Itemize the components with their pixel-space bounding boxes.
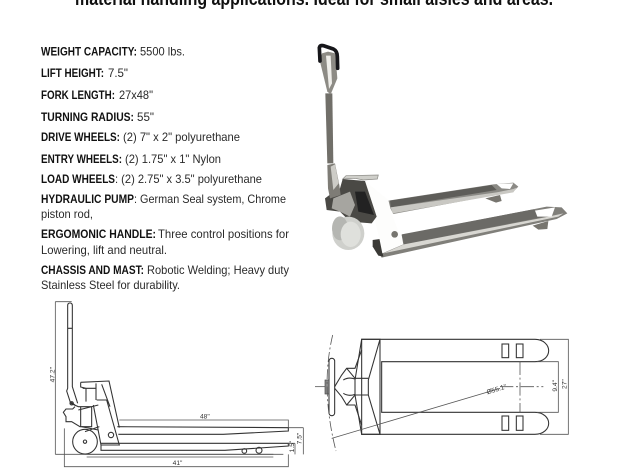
drive wheel — [332, 216, 364, 250]
turning radius line: Ø55.1" — [486, 383, 508, 396]
spec: chassis and mast: CHASSIS AND MAST: — [41, 264, 144, 277]
spec: turning radius: TURNING RADIUS: — [41, 111, 134, 124]
spec: chassis and mast: Robotic Welding; Heavy duty — [147, 264, 289, 277]
spec: hydraulic pump — [41, 193, 286, 221]
width dimensions: 27" — [562, 379, 569, 389]
spec: chassis and mast: Stainless Steel for durability. — [41, 279, 180, 292]
dimension labels: 7.5" — [297, 432, 304, 444]
spec: entry wheels: (2) 1.75" x 1" Nylon — [125, 153, 221, 166]
drive wheel — [73, 429, 97, 454]
specification list — [41, 46, 289, 292]
chassis — [81, 381, 119, 445]
spec: chassis and mast — [41, 264, 289, 292]
spec: entry wheels — [41, 153, 221, 166]
handle — [315, 358, 335, 416]
spec: fork length: 27x48" — [119, 89, 153, 102]
spec: lift height: 7.5" — [108, 67, 128, 80]
white chassis plate — [365, 181, 403, 253]
turning radius line — [332, 383, 508, 438]
bolt — [391, 231, 398, 238]
spec: weight capacity: 5500 lbs. — [140, 46, 185, 58]
pump — [63, 402, 99, 432]
spec: entry wheels: ENTRY WHEELS: — [41, 153, 122, 166]
spec: fork length: FORK LENGTH: — [41, 89, 115, 102]
height dimension — [49, 302, 283, 454]
spec: load wheels — [41, 173, 262, 186]
rear fork — [388, 183, 518, 214]
spec: hydraulic pump: : German Seal system, Chrome — [134, 193, 286, 206]
load wheels — [85, 447, 273, 457]
mast — [325, 93, 341, 198]
spec: weight capacity: WEIGHT CAPACITY: — [41, 46, 137, 58]
spec: ergonomic handle: ERGOMONIC HANDLE: — [41, 228, 156, 241]
front fork — [373, 207, 567, 258]
pallet truck photo illustration — [319, 46, 567, 258]
top view technical drawing — [315, 335, 569, 451]
spec: ergonomic handle — [41, 228, 289, 257]
height dimension: 47.2" — [49, 366, 56, 382]
dimension labels: 48" — [200, 413, 210, 420]
forks — [101, 427, 288, 450]
spec: hydraulic pump: piston rod, — [41, 208, 93, 221]
pump body — [325, 179, 377, 223]
center marks — [500, 362, 543, 412]
spec: turning radius: 55" — [137, 111, 154, 124]
chassis — [355, 339, 380, 434]
dimension labels — [64, 413, 304, 467]
side view technical drawing — [49, 302, 304, 467]
spec: hydraulic pump: HYDRAULIC PUMP — [41, 193, 134, 206]
spec: drive wheels — [41, 131, 240, 144]
width dimensions: 9.4" — [552, 379, 559, 392]
dimension labels: 1.5" — [289, 440, 296, 452]
spec: drive wheels: DRIVE WHEELS: — [41, 131, 120, 144]
width dimensions — [537, 339, 569, 434]
spec: load wheels: : (2) 2.75" x 3.5" polyurethane — [115, 173, 262, 186]
spec: ergonomic handle: Lowering, lift and neutral. — [41, 244, 167, 257]
spec: load wheels: LOAD WHEELS — [41, 173, 115, 186]
mast and handle — [67, 303, 78, 403]
fork outline — [362, 339, 549, 434]
spec: lift height: LIFT HEIGHT: — [41, 67, 104, 80]
pump linkage — [335, 350, 368, 425]
top bracket — [343, 175, 378, 180]
dimension labels: 41" — [173, 460, 183, 467]
spec: ergonomic handle: Three control positions for — [158, 228, 289, 241]
spec: drive wheels: (2) 7" x 2" polyurethane — [123, 131, 240, 144]
fork slots — [502, 344, 523, 430]
turning arc — [327, 335, 336, 451]
handle — [319, 46, 338, 94]
